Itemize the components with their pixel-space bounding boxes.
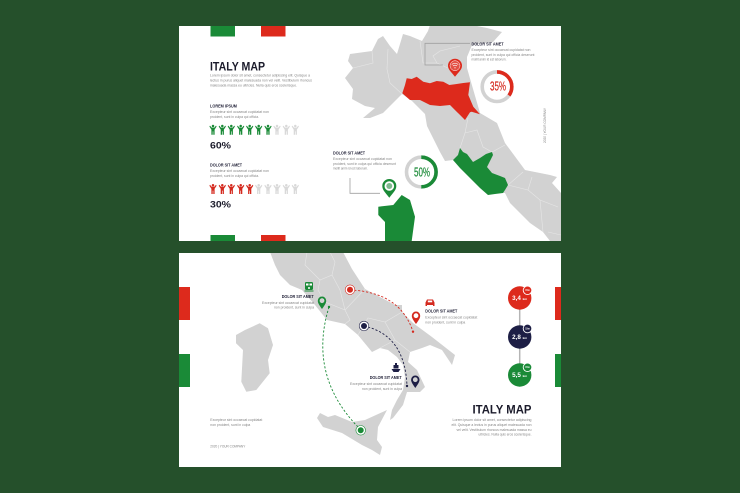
vertical company label: 2020 | YOUR COMPANY xyxy=(543,108,547,143)
stat block: 60 percent: LOREM IPSUM xyxy=(210,104,238,108)
route: green dashed xyxy=(323,307,358,427)
stat block: 60 percent: proident, sunt in culpa qui officia. xyxy=(210,115,259,119)
callout: red region text xyxy=(472,42,534,62)
callout: green route text: DOLOR SIT AMET xyxy=(282,294,314,299)
intro text: lectus in purus aliquet malesuada non vel velit. Vestibulum rhoncus xyxy=(210,78,312,82)
island: Sardinia xyxy=(236,323,273,392)
stat block: 60 percent: 60% xyxy=(210,141,231,151)
route: navy dashed xyxy=(364,326,407,386)
distance node: 3,4 km: 15m xyxy=(525,290,530,292)
region: Sardinia xyxy=(378,195,415,241)
flag bar: left red xyxy=(179,287,190,320)
stat block: 30 percent: 30% xyxy=(210,200,231,210)
callout: green region text: DOLOR SIT AMET xyxy=(333,150,365,156)
distance node: 5,5 km xyxy=(508,363,532,387)
callout: red region text: proident, sunt in culpa qui officia deserunt xyxy=(472,53,534,57)
icon: green globe pin xyxy=(382,179,396,198)
intro text: Lorem ipsum dolor sit amet, consectetur adipiscing elit. Quisque a xyxy=(210,74,311,78)
distance node: 2,8 km: 2,8 km xyxy=(512,335,528,341)
icon: red wifi pin xyxy=(448,59,462,77)
map: northern and central Italy xyxy=(345,25,561,241)
callout: green region text: proident, sunt in culpa qui officia deserunt xyxy=(333,162,396,166)
footnote text xyxy=(210,418,262,427)
distance node: 3,4 km xyxy=(508,286,532,310)
flag bar: right red xyxy=(555,287,561,320)
description text xyxy=(452,418,532,436)
stat block: 60 percent xyxy=(209,104,299,151)
distance node: 5,5 km: 15m xyxy=(525,367,530,369)
distance node: 3,4 km: 3,4 km xyxy=(512,296,528,302)
callout: red region text: DOLOR SIT AMET xyxy=(472,42,504,46)
panel: northern Italy slide xyxy=(179,25,561,241)
callout: navy route text: Excepteur sint occaecat cupidatat xyxy=(350,382,402,386)
map: southern Italy xyxy=(236,252,455,455)
donut chart: 35%: 35% xyxy=(490,80,506,94)
icon: green pin xyxy=(318,296,326,309)
callout: red route text: DOLOR SIT AMET xyxy=(425,308,458,314)
region: Emilia-Romagna xyxy=(402,77,480,120)
callout: green route text xyxy=(262,294,315,310)
icon: red car xyxy=(426,300,434,306)
flag bar: right green xyxy=(555,354,561,387)
icon: green train xyxy=(304,282,314,291)
callout: green region text: mollit anim id est laborum. xyxy=(333,166,368,170)
description text: vel velit. Vestibulum rhoncus malesuada massa eu xyxy=(456,428,532,432)
stat block: 30 percent: Excepteur sint occaecat cupidatat non xyxy=(210,169,269,173)
region: Lazio xyxy=(453,148,508,195)
callout: red region text: Excepteur sint occaecat cupidatat non xyxy=(472,48,530,52)
marker: red origin xyxy=(345,285,355,295)
footnote text: Excepteur sint occaecat cupidatat xyxy=(210,418,262,422)
donut chart: 35% xyxy=(482,72,512,101)
callout: red route text xyxy=(425,308,477,324)
island: Sicily xyxy=(317,410,387,455)
intro text xyxy=(210,74,312,88)
flag strips bottom xyxy=(210,235,286,241)
route end dots xyxy=(328,306,414,387)
callout: red route text: Excepteur sint occaecat cupidatat xyxy=(425,316,477,320)
callout: red region text: mollit anim id est laborum. xyxy=(472,58,506,62)
icon: navy ship xyxy=(392,363,400,372)
callout: green route text: non proident, sunt in culpa xyxy=(274,306,315,310)
description text: elit. Quisque a lectus in purus aliquet malesuada non xyxy=(452,423,532,427)
flag bar: left green xyxy=(179,354,190,387)
route: red dashed xyxy=(350,290,413,332)
distance node: 2,8 km xyxy=(508,324,532,349)
callout: navy route text xyxy=(350,375,403,391)
footnote text: non proident, sunt in culpa xyxy=(210,423,251,427)
description text: Lorem ipsum dolor sit amet, consectetur adipiscing xyxy=(452,418,532,422)
callout: navy route text: DOLOR SIT AMET xyxy=(370,375,402,380)
company label: 2020 | YOUR COMPANY xyxy=(210,444,246,448)
stat block: 30 percent: proident, sunt in culpa qui officia. xyxy=(210,174,259,178)
callout: red route text: non proident, sunt in culpa xyxy=(425,320,466,324)
pictogram row: green people xyxy=(209,125,299,135)
title: ITALY MAP xyxy=(210,62,265,74)
title: ITALY MAP xyxy=(472,404,532,416)
callout: green region text: Excepteur sint occaecat cupidatat non xyxy=(333,157,392,161)
stat block: 60 percent: Excepteur sint occaecat cupidatat non xyxy=(210,110,269,114)
distance timeline xyxy=(508,286,532,387)
stat block: 30 percent: DOLOR SIT AMET xyxy=(210,162,242,168)
marker: navy origin xyxy=(359,321,369,331)
connector line: red callout xyxy=(425,43,470,65)
flag strips top xyxy=(210,26,286,36)
icon: red pin xyxy=(412,312,420,324)
icon: navy pin xyxy=(411,376,420,388)
donut chart: 50% xyxy=(406,157,436,187)
marker: green destination xyxy=(356,426,366,435)
callout: green route text: Excepteur sint occaecat cupidatat xyxy=(262,301,314,305)
intro text: malesuada massa eu ultricies. Nulla quis eros scelerisque. xyxy=(210,84,297,88)
distance node: 5,5 km: 5,5 km xyxy=(512,373,528,379)
stat block: 30 percent xyxy=(209,162,299,210)
callout: navy route text: non proident, sunt in culpa xyxy=(362,387,403,391)
panel: southern Italy slide xyxy=(179,252,561,467)
callout: green region text xyxy=(333,150,396,170)
distance node: 2,8 km: 15m xyxy=(525,328,530,330)
description text: ultricies. Nulla quis eros scelerisque. xyxy=(478,432,532,436)
connector line: green callout xyxy=(350,178,380,193)
pictogram row: red people xyxy=(209,184,299,194)
donut chart: 50%: 50% xyxy=(414,166,430,180)
